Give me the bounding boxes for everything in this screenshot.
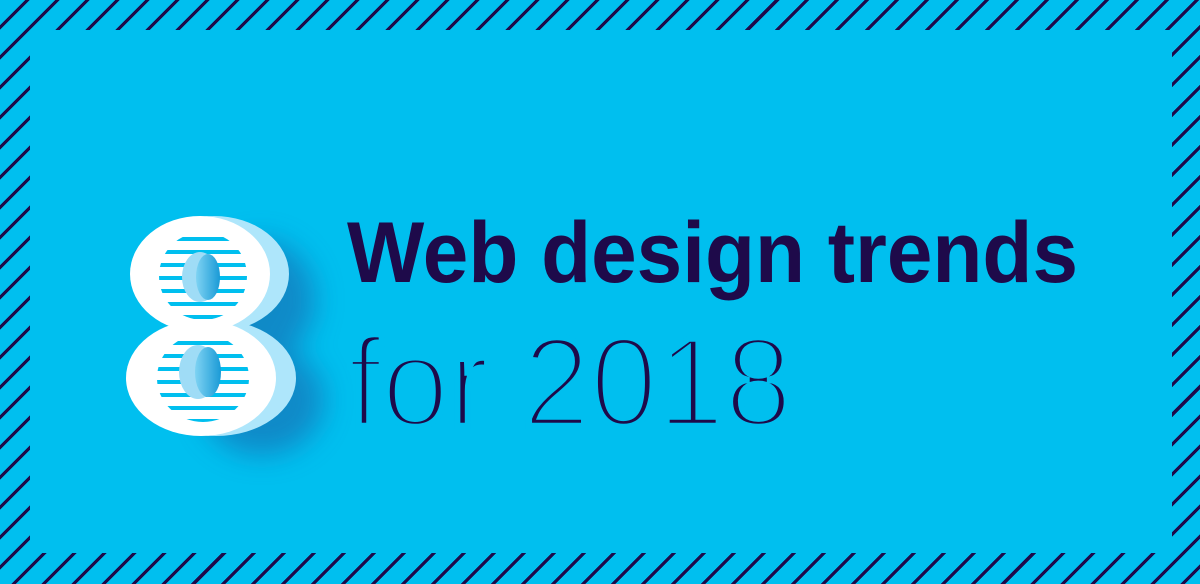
holes [182,252,218,302]
subtitle: for 2018 [348,311,792,453]
icon: big number 8 [126,216,324,455]
shadow [200,240,324,455]
title: Web design trends [347,205,1078,301]
3D side [136,216,296,436]
striped inner [157,232,249,422]
white face [126,216,276,436]
